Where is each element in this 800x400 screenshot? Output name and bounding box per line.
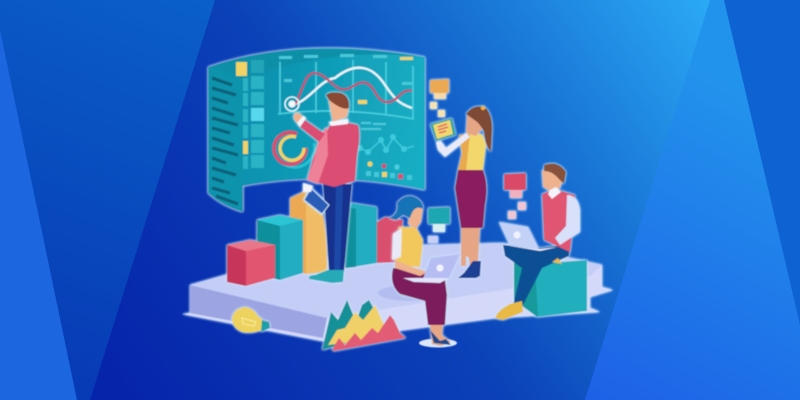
shoe [495,301,523,320]
dashboard screen [208,48,425,212]
folder hand [304,188,329,214]
hair [389,196,423,220]
screen left text rows [212,78,238,204]
woman standing [430,106,492,278]
torso [395,227,423,267]
laptop [499,222,539,249]
shoes [430,325,451,346]
tablet [430,118,456,141]
cube seat [514,260,587,317]
screen legend dots [361,122,412,180]
sleeve [555,195,580,245]
arm [436,133,470,157]
shoes [309,270,344,283]
small line graph [351,135,414,156]
seated woman [389,196,460,346]
hair [466,106,492,152]
pants [392,268,447,325]
vest [542,189,575,252]
blouse [458,134,486,170]
man at screen [294,92,359,283]
head [542,170,565,192]
floating cubes: orange [430,79,449,117]
platform [182,243,613,341]
legs [323,184,352,272]
donut chart [274,132,314,167]
floating cube: teal [428,207,450,243]
leg [503,244,570,306]
arm to screen [300,120,325,142]
collar [329,119,348,126]
jacket [307,122,359,187]
area chart [322,300,406,351]
chart marker [285,97,299,111]
arm [395,260,428,276]
block: red left [227,240,275,286]
heels [458,261,481,278]
icon: light bulb [232,307,270,333]
seated man on cube [495,164,587,320]
head [408,206,423,229]
head [466,115,483,136]
block: red rear [377,217,403,263]
block: teal [257,215,303,280]
skirt [455,170,487,228]
shoe pad [419,338,457,348]
bar blocks [227,190,403,286]
laptop [422,254,460,281]
legs [461,226,480,268]
shadow: seated woman [378,285,446,301]
block: teal rear [345,203,377,268]
head [329,95,349,122]
line chart [278,54,414,119]
block: orange [290,190,327,274]
screen tile grid [236,60,264,169]
floating cubes: red [504,173,526,219]
